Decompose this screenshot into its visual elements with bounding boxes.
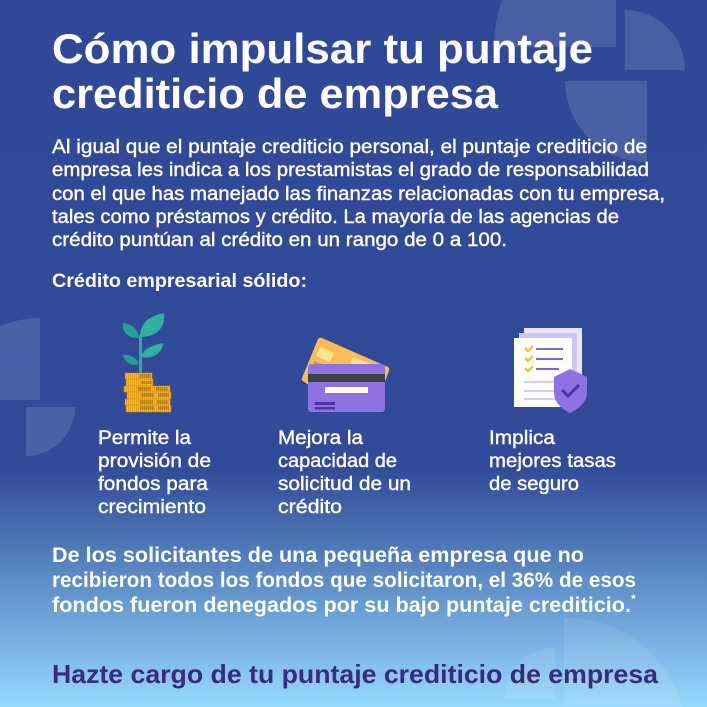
title: Cómo impulsar tu puntaje bbox=[52, 25, 593, 72]
caption: insurance rates: Implica bbox=[489, 427, 555, 449]
title: crediticio de empresa bbox=[52, 70, 499, 117]
intro paragraph: con el que has manejado las finanzas relacionadas con tu empresa, bbox=[52, 183, 665, 205]
icon: credit cards bbox=[302, 338, 389, 412]
caption: growth funding: fondos para bbox=[98, 473, 208, 495]
caption: application capacity bbox=[278, 427, 411, 518]
icon: plant on coins bbox=[123, 313, 171, 412]
title bbox=[52, 25, 593, 117]
caption: application capacity: capacidad de bbox=[278, 450, 397, 472]
caption: application capacity: Mejora la bbox=[278, 427, 363, 449]
intro paragraph: tales como préstamos y crédito. La mayoría de las agencias de bbox=[52, 206, 619, 228]
caption: insurance rates: mejores tasas bbox=[489, 450, 616, 472]
caption: growth funding: provisión de bbox=[98, 450, 211, 472]
statistic statement: fondos fueron denegados por su bajo puntaje crediticio. bbox=[52, 594, 631, 617]
caption: application capacity: crédito bbox=[278, 496, 342, 518]
intro paragraph: crédito puntúan al crédito en un rango de 0 a 100. bbox=[52, 229, 507, 251]
statistic statement: recibieron todos los fondos que solicitaron, el 36% de esos bbox=[52, 569, 636, 592]
caption: growth funding: Permite la bbox=[98, 427, 191, 449]
subheading: Crédito empresarial sólido: bbox=[52, 270, 307, 292]
intro paragraph: Al igual que el puntaje crediticio personal, el puntaje crediticio de bbox=[52, 136, 647, 158]
decorative quarter circles: left bbox=[0, 318, 75, 456]
intro paragraph bbox=[52, 136, 665, 251]
statistic statement bbox=[52, 544, 636, 617]
call to action: Hazte cargo de tu puntaje crediticio de empresa bbox=[52, 659, 659, 689]
intro paragraph: empresa les indica a los prestamistas el grado de responsabilidad bbox=[52, 159, 649, 181]
statistic statement: * bbox=[631, 592, 636, 606]
decorative quarter circles: top right bbox=[494, 0, 685, 162]
decorative quarter circles: bottom right bbox=[504, 618, 682, 707]
caption: growth funding bbox=[98, 427, 211, 518]
caption: insurance rates: de seguro bbox=[489, 473, 579, 495]
statistic statement: De los solicitantes de una pequeña empresa que no bbox=[52, 544, 584, 567]
caption: growth funding: crecimiento bbox=[98, 496, 206, 518]
icon: document with shield bbox=[514, 328, 587, 413]
caption: insurance rates bbox=[489, 427, 616, 495]
caption: application capacity: solicitud de un bbox=[278, 473, 411, 495]
